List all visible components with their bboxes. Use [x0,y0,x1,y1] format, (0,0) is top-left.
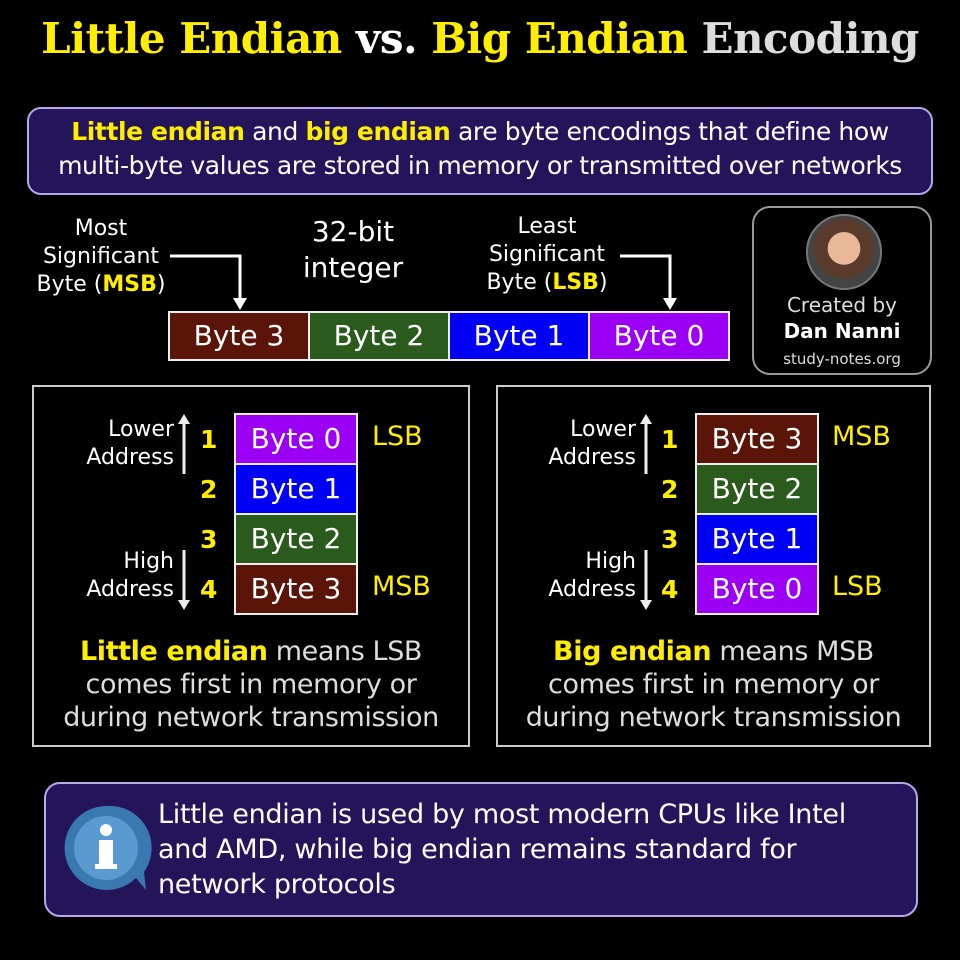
panel: big endian: Lower [570,417,636,442]
panel: little endian: LSB [372,421,423,452]
panel: little endian: 2 [200,475,217,504]
caption: comes first in memory or [86,669,416,700]
panel: big endian: 2 [661,475,678,504]
panel: little endian: High [123,549,174,574]
panel: big endian: Address [548,577,636,602]
panel: big endian [496,385,931,747]
byte strip [168,311,730,361]
intro box: Little endian and big endian are byte encodings that define how [71,117,889,146]
panel: big endian: MSB [832,421,891,452]
panel: little endian: 4 [200,575,217,604]
panel: big endian: 1 [661,425,678,454]
panel: big endian: High [585,549,636,574]
panel: big endian: LSB [832,571,883,602]
panel: big endian: 3 [661,525,678,554]
32-bit integer label [303,215,404,284]
avatar [806,214,882,290]
LSB label: Byte (LSB) [486,270,608,295]
caption [63,636,439,733]
caption [526,636,901,733]
info box: Little endian is used by most modern CPUs like Intel [158,799,846,830]
info box [44,782,918,917]
panel: big endian: Byte 0 [712,572,802,605]
byte strip: Byte 0 [614,319,704,352]
caption: Big endian means MSB [553,636,874,667]
panel: little endian: MSB [372,571,431,602]
info box: and AMD, while big endian remains standard for [158,834,796,865]
panel: big endian: Byte 3 [712,422,802,455]
byte strip: Byte 3 [194,319,284,352]
info box: network protocols [158,869,395,900]
intro box: multi-byte values are stored in memory or transmitted over networks [58,151,902,180]
panel: big endian: Byte 2 [712,472,802,505]
icon: info [64,806,152,890]
panel: little endian: 3 [200,525,217,554]
MSB label: Most [75,216,127,241]
author card [752,206,932,375]
MSB label: Significant [43,244,159,269]
panel: big endian: Byte 1 [712,522,802,555]
caption: Little endian means LSB [80,636,422,667]
panel: little endian: Lower [108,417,174,442]
byte strip: Byte 1 [474,319,564,352]
LSB label: Least [518,214,576,239]
byte strip: Byte 2 [334,319,424,352]
MSB label: Byte (MSB) [37,272,165,297]
panel: little endian: Byte 0 [251,422,341,455]
panel: little endian: 1 [200,425,217,454]
author card: study-notes.org [783,350,901,368]
author card: Dan Nanni [784,319,900,343]
caption: comes first in memory or [548,669,879,700]
LSB label: Significant [489,242,605,267]
32-bit integer label: 32-bit [312,215,394,248]
32-bit integer label: integer [303,251,403,284]
intro box [27,107,933,195]
panel: little endian: Byte 2 [251,522,341,555]
panel: little endian: Byte 1 [251,472,341,505]
panel: little endian [32,385,470,747]
author card: Created by [787,293,897,317]
panel: little endian: Address [86,577,174,602]
panel: big endian: 4 [661,575,678,604]
panel: little endian: Address [86,445,174,470]
caption: during network transmission [63,702,439,733]
title: Little Endian vs. Big Endian Encoding [41,14,919,63]
LSB label [486,214,608,295]
panel: big endian: Address [548,445,636,470]
panel: little endian: Byte 3 [251,572,341,605]
caption: during network transmission [526,702,901,733]
MSB label [37,216,165,297]
